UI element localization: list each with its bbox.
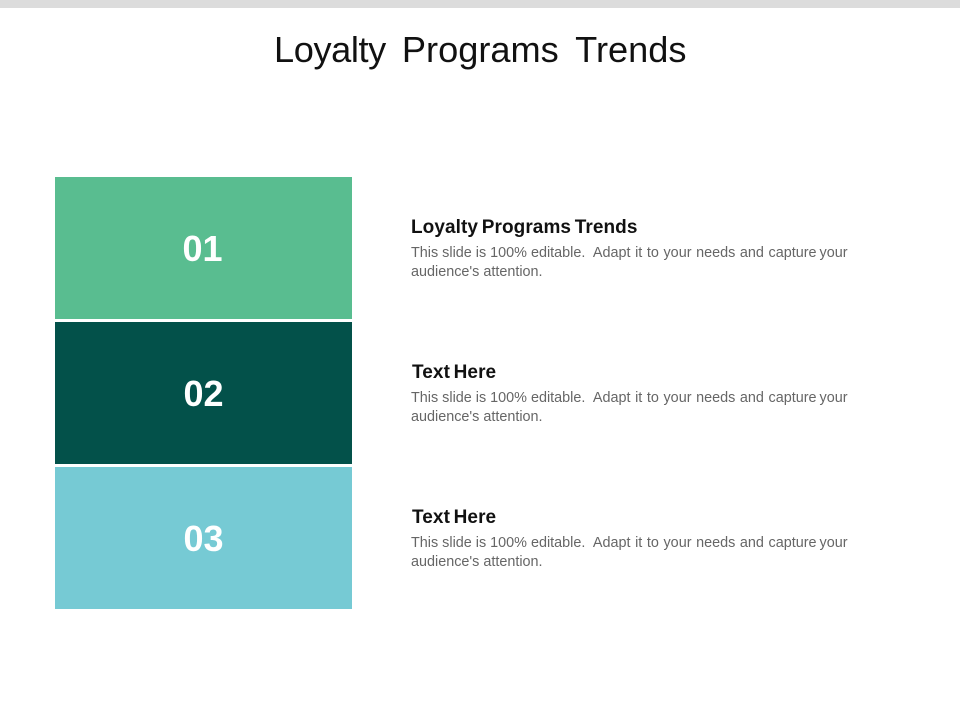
number 01: 01 (182, 228, 223, 269)
panel: 02 dark teal block (55, 322, 352, 464)
number 03: 03 (183, 518, 224, 559)
body text 3: This slide is 100% editable. Adapt it to your needs and capture your (411, 535, 848, 551)
panel: 03 light blue block (55, 467, 352, 609)
body text 2 (411, 390, 848, 424)
body text 1: audience's attention. (411, 264, 543, 280)
text block 3 (411, 507, 848, 570)
body text 1: This slide is 100% editable. Adapt it to your needs and capture your (411, 245, 848, 261)
heading 2: Text Here (412, 362, 496, 383)
text block 2 (411, 362, 848, 424)
body text 1 (411, 245, 848, 280)
text block 1 (411, 217, 848, 280)
body text 3 (411, 535, 848, 570)
body text 2: audience's attention. (411, 408, 543, 424)
body text 2: This slide is 100% editable. Adapt it to your needs and capture your (411, 390, 848, 406)
top grey bar (0, 0, 960, 8)
heading 3: Text Here (412, 507, 496, 528)
heading 1: Loyalty Programs Trends (411, 217, 638, 238)
body text 3: audience's attention. (411, 554, 543, 570)
title: Loyalty Programs Trends (274, 29, 686, 70)
number 02: 02 (183, 373, 224, 414)
panel: 01 green block (55, 177, 352, 319)
